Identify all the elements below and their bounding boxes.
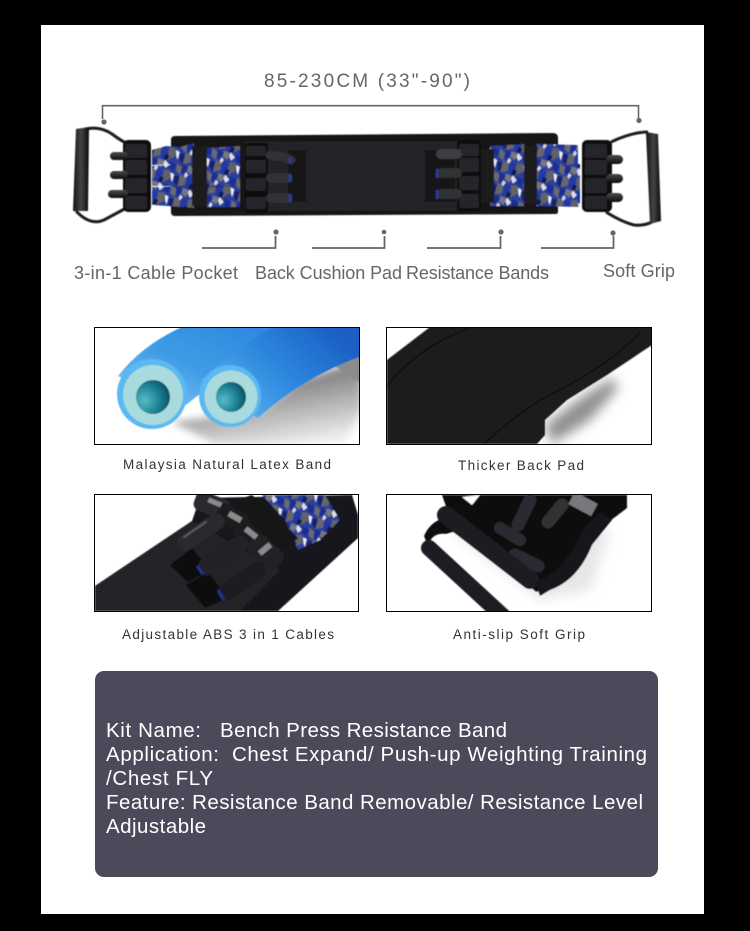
- caption: ABS cables: Adjustable ABS 3 in 1 Cables: [122, 627, 334, 642]
- label: soft grip: Soft Grip: [603, 261, 675, 281]
- dimension label: 85-230CM (33"-90"): [264, 71, 470, 92]
- caption: back pad: Thicker Back Pad: [458, 458, 584, 473]
- far grip: [429, 548, 505, 618]
- near grip: [446, 515, 530, 580]
- spec text: Adjustable: [106, 815, 206, 838]
- left connector: [108, 140, 151, 212]
- cable ends: [500, 500, 562, 566]
- dimension bracket: [101, 106, 642, 125]
- spec text: Application:: [106, 743, 219, 766]
- photo: latex tubes: [94, 326, 362, 444]
- left resistance bands: [152, 143, 240, 208]
- label: cushion pad: Back Cushion Pad: [255, 263, 402, 283]
- right resistance bands: [490, 144, 580, 207]
- right inner connector: [437, 140, 481, 211]
- soft shadow: [450, 530, 610, 600]
- strap and cable body: [442, 495, 627, 592]
- connector heads: [192, 495, 284, 568]
- spec text: Feature: Resistance Band Removable/ Resistance Level: [106, 791, 643, 814]
- label: resistance bands: Resistance Bands: [406, 263, 549, 283]
- right tube end: [199, 365, 261, 427]
- product photo: resistance band belt: [73, 127, 661, 225]
- right tube: [202, 326, 362, 418]
- photo: soft grip: [386, 492, 652, 618]
- spec text: Kit Name:: [106, 719, 201, 742]
- caption: soft grip: Anti-slip Soft Grip: [453, 627, 585, 642]
- left handle: [73, 127, 130, 222]
- tube shadow: [172, 360, 362, 444]
- right band straps: [481, 146, 537, 204]
- right connector: [582, 140, 623, 212]
- back pad: [171, 133, 558, 216]
- spec text: [106, 719, 647, 838]
- pocket tabs: [170, 548, 222, 608]
- left tube end: [117, 359, 187, 429]
- caption: latex band: Malaysia Natural Latex Band: [123, 457, 331, 472]
- belt: [95, 495, 358, 611]
- spec text: Bench Press Resistance Band: [220, 719, 507, 742]
- spec text: Chest Expand/ Push-up Weighting Training: [232, 743, 647, 766]
- left inner connector: [245, 143, 291, 213]
- photo: back pad: [386, 327, 652, 444]
- strap: [244, 495, 298, 542]
- bands: [262, 495, 340, 550]
- cable ends: [184, 522, 258, 592]
- right handle: [606, 132, 661, 225]
- strap right: [535, 512, 612, 596]
- left band strap: [192, 146, 207, 206]
- callout leaders: [202, 229, 616, 248]
- photo: cable pockets: [94, 489, 358, 612]
- spec panel: [95, 671, 658, 877]
- left tube: [118, 328, 274, 406]
- spec text: /Chest FLY: [106, 767, 213, 790]
- label: cable pocket: 3-in-1 Cable Pocket: [74, 263, 238, 283]
